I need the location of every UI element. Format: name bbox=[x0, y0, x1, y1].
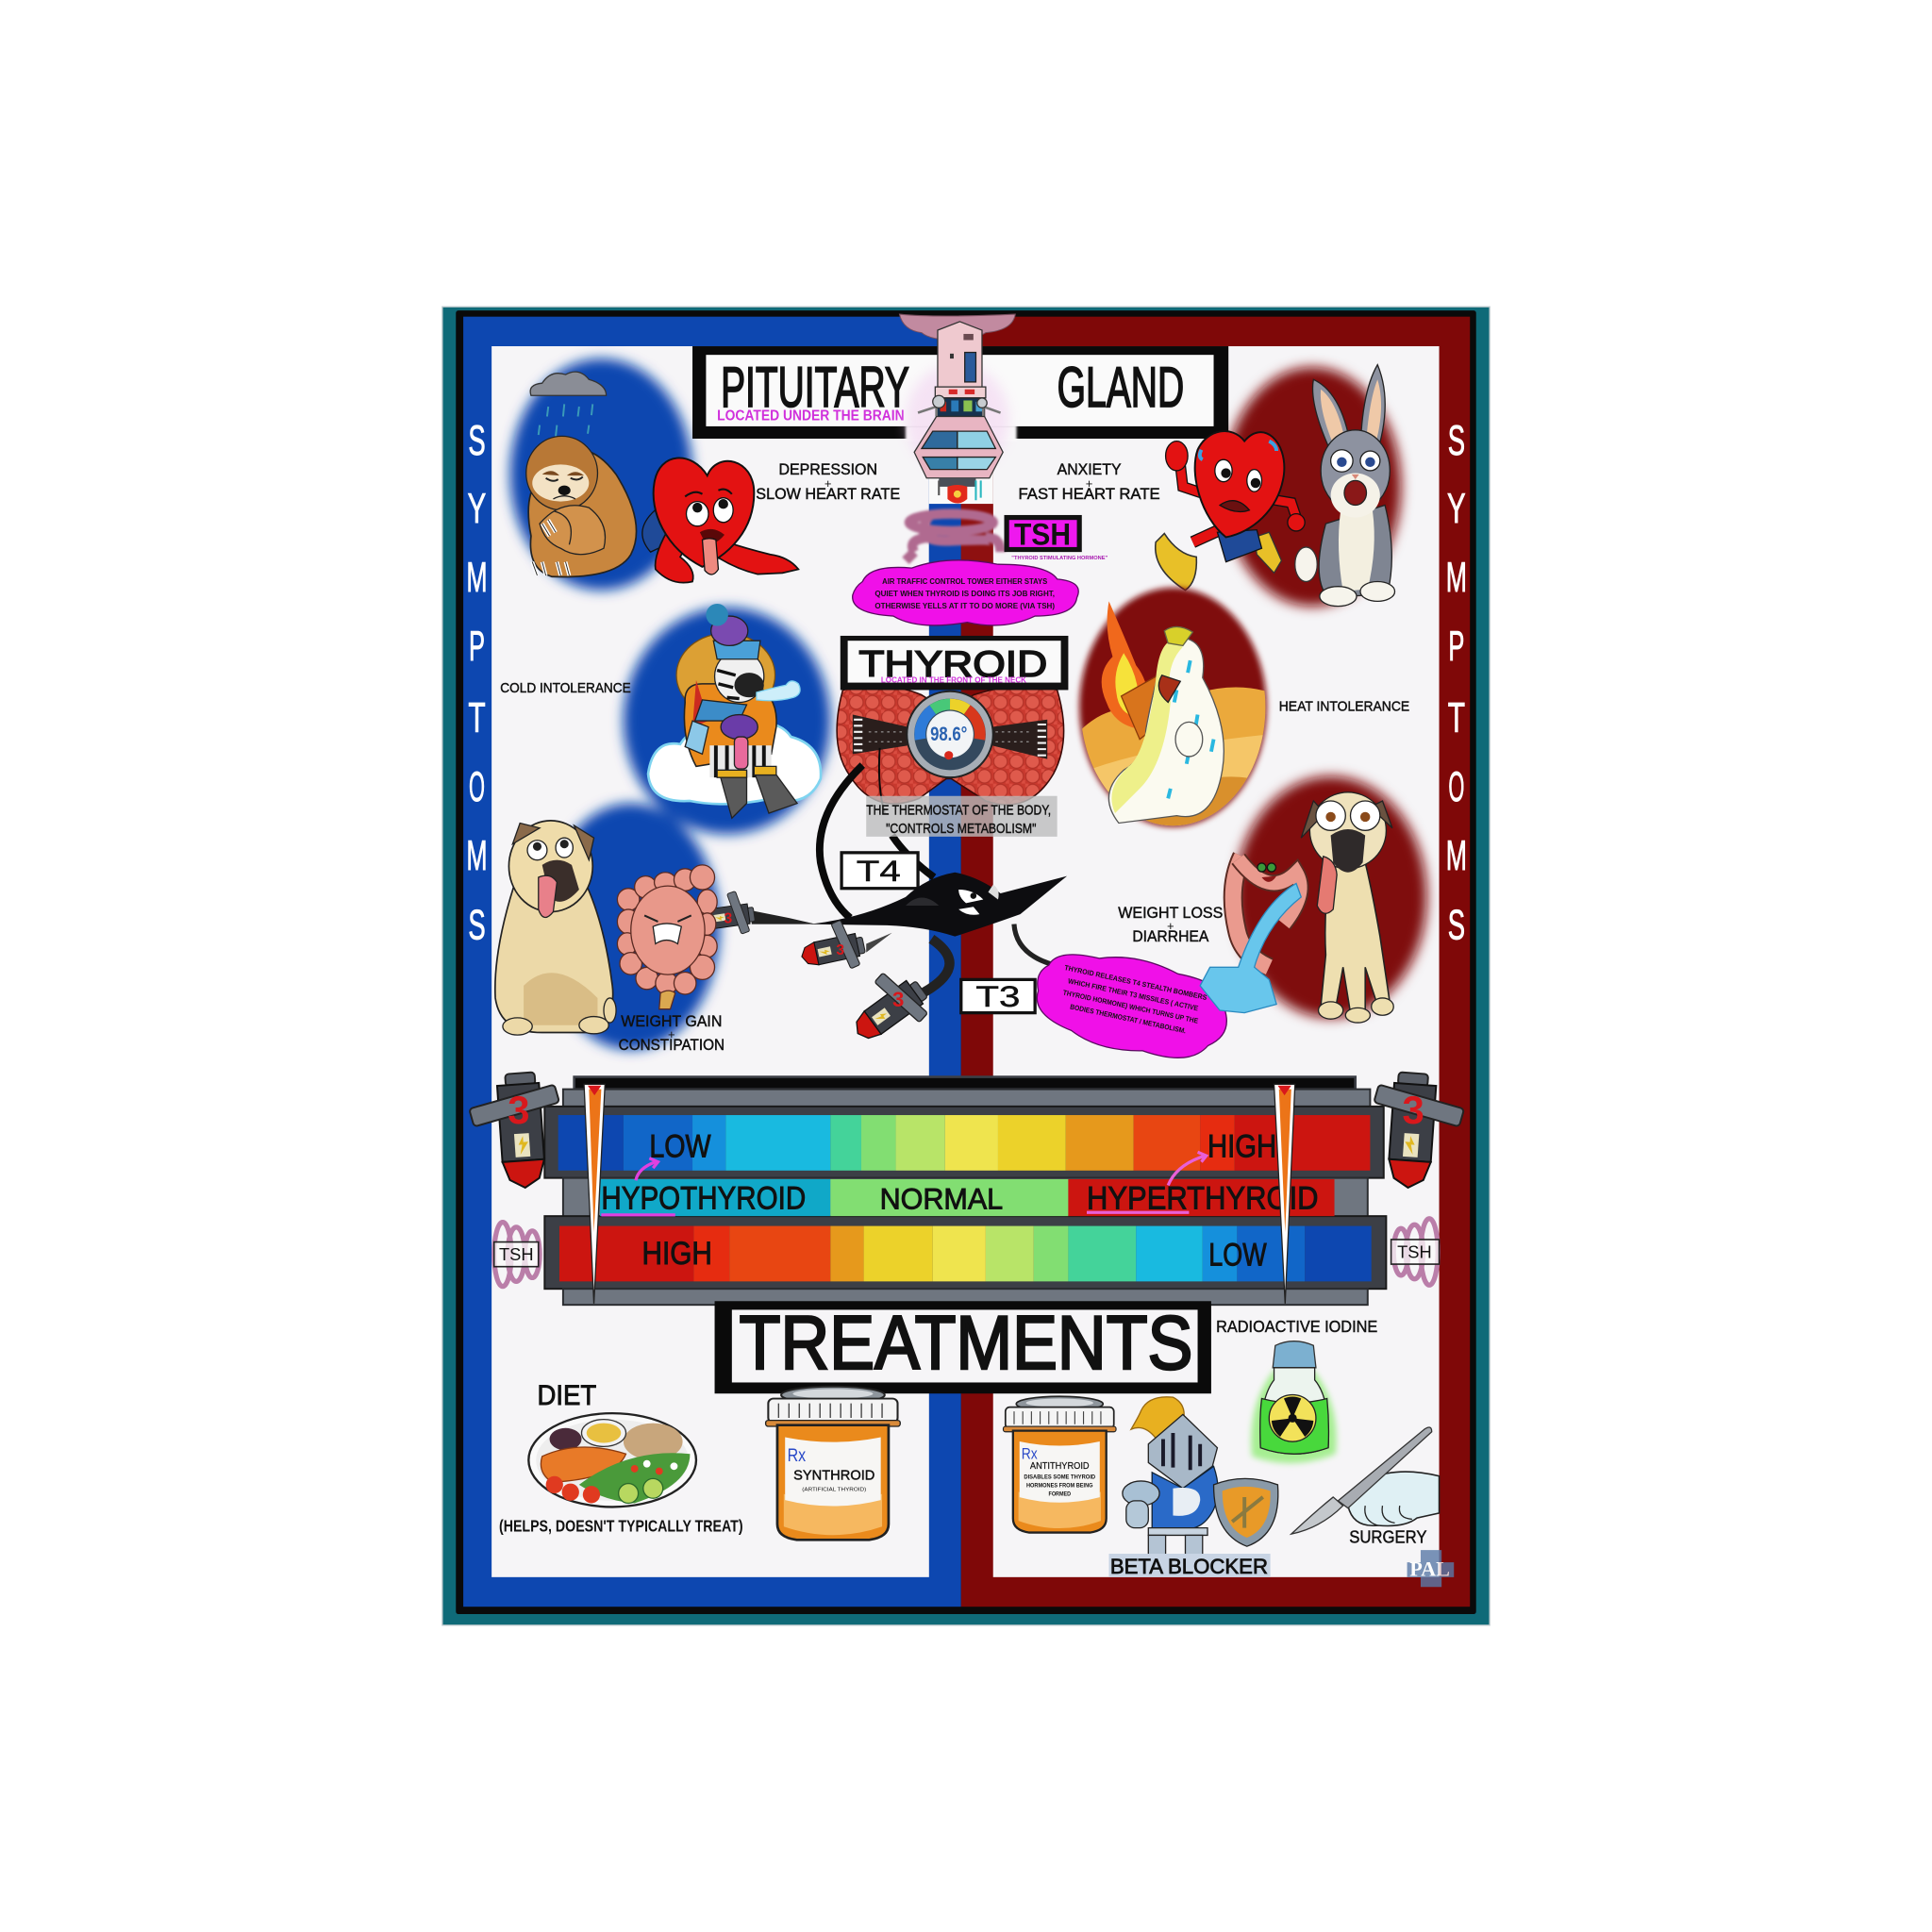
icon: beta blocker knight bbox=[1123, 1397, 1278, 1557]
icon: left TSH waves bbox=[494, 1223, 540, 1287]
right symptoms label: T bbox=[1448, 695, 1465, 741]
icon: overweight pug bbox=[495, 821, 616, 1035]
icon: scared rabbit bbox=[1295, 365, 1395, 607]
icon: T3 missile hitting intestine with trail: 3 bbox=[724, 910, 733, 926]
left symptoms label: O bbox=[469, 764, 485, 810]
icon: constipated intestine bbox=[617, 865, 717, 1009]
label: weight loss and diarrhea: DIARRHEA bbox=[1132, 928, 1208, 945]
icon: synthroid bottle: SYNTHROID bbox=[793, 1468, 874, 1484]
meter labels: HYPOTHYROID bbox=[601, 1180, 806, 1216]
icon: large T3 missile with trail: 3 bbox=[892, 988, 904, 1011]
icon: sad crawling heart bbox=[642, 458, 798, 583]
icon: plate of healthy food bbox=[528, 1413, 696, 1507]
icon: T3 missile hitting intestine with trail bbox=[696, 889, 816, 940]
callout: stealth bombers and T3 missiles: THYROID HORMONE) WHICH TURNS UP THE bbox=[1062, 989, 1199, 1025]
label: thermostat of the body: "CONTROLS METABOLISM" bbox=[886, 821, 1036, 837]
icon: left T3 missile: 3 bbox=[508, 1088, 530, 1132]
icon: hand holding scalpel bbox=[1291, 1427, 1440, 1534]
card background bbox=[442, 307, 1490, 1625]
icon: falling T3 missile bbox=[796, 916, 892, 978]
meter: T4/T3 level bar bbox=[558, 1115, 1370, 1171]
right symptoms label: S bbox=[1448, 418, 1465, 464]
icon: falling T3 missile: 3 bbox=[836, 942, 844, 958]
label: thermostat of the body bbox=[866, 796, 1058, 837]
TSH box bbox=[1004, 515, 1108, 561]
left symptoms label bbox=[466, 418, 488, 948]
icon: antithyroid bottle: HORMONES FROM BEING bbox=[1026, 1482, 1093, 1489]
icon: radioactive iodine bottle bbox=[1251, 1341, 1337, 1463]
right symptoms label: M bbox=[1446, 555, 1467, 601]
T3 label bbox=[961, 924, 1072, 1013]
icon: antithyroid bottle: ANTITHYROID bbox=[1030, 1461, 1090, 1472]
left symptoms label: M bbox=[466, 555, 488, 601]
title box: pituitary gland bbox=[692, 346, 1228, 441]
T3 label: T3 bbox=[975, 980, 1020, 1013]
icon: left T3 missile bbox=[467, 1071, 565, 1191]
TSH box: "THYROID STIMULATING HORMONE" bbox=[1011, 556, 1108, 561]
left symptoms label: Y bbox=[468, 486, 486, 532]
icon: synthroid bottle bbox=[766, 1387, 900, 1540]
left symptoms label: S bbox=[468, 902, 486, 948]
title box: pituitary gland: LOCATED UNDER THE BRAIN bbox=[717, 408, 905, 424]
label: cold intolerance: COLD INTOLERANCE bbox=[500, 680, 631, 696]
left symptoms label: P bbox=[469, 624, 485, 670]
radio waves from tower bbox=[906, 504, 1001, 566]
logo: PAL: PAL bbox=[1409, 1557, 1450, 1581]
callout: stealth bombers and T3 missiles: WHICH FIRE THEIR T3 MISSILES ( ACTIVE bbox=[1067, 976, 1199, 1012]
infographic canvas bbox=[441, 306, 1491, 1626]
meter needle: low end bbox=[584, 1084, 605, 1304]
callout: stealth bombers and T3 missiles: THYROID RELEASES T4 STEALTH BOMBERS bbox=[1064, 963, 1208, 1002]
right symptoms label: O bbox=[1448, 764, 1464, 810]
label: helps, doesn't treat: (HELPS, DOESN'T TYPICALLY TREAT) bbox=[499, 1517, 743, 1536]
callout: air traffic control tower bbox=[853, 560, 1078, 625]
label: anxiety and fast heart rate: FAST HEART RATE bbox=[1019, 486, 1160, 503]
callout: air traffic control tower: AIR TRAFFIC CONTROL TOWER EITHER STAYS bbox=[882, 576, 1048, 586]
label: depression and slow heart rate: DEPRESSION bbox=[778, 461, 877, 478]
meter: TSH level bar bbox=[559, 1226, 1372, 1281]
meter labels: LOW bbox=[649, 1128, 711, 1164]
meter labels: NORMAL bbox=[880, 1182, 1003, 1215]
icon: right T3 missile bbox=[1368, 1071, 1466, 1191]
title box: thyroid bbox=[841, 636, 1068, 690]
meter: thyroid state bar bbox=[600, 1179, 1335, 1216]
T4 release trails bbox=[820, 748, 934, 918]
left symptoms label: T bbox=[468, 695, 486, 741]
right symptoms label: Y bbox=[1447, 486, 1466, 532]
label: weight loss and diarrhea: WEIGHT LOSS bbox=[1118, 905, 1223, 922]
symptom background blobs bbox=[510, 358, 1426, 1050]
callout: stealth bombers and T3 missiles: BODIES THERMOSTAT / METABOLISM. bbox=[1069, 1002, 1187, 1035]
meter needle: high end bbox=[1274, 1084, 1295, 1304]
label: diet: DIET bbox=[537, 1380, 596, 1411]
icon: sloth with rain cloud bbox=[526, 372, 637, 577]
icon: synthroid bottle: (ARTIFICIAL THYROID) bbox=[802, 1487, 866, 1492]
title box: thyroid: LOCATED IN THE FRONT OF THE NECK bbox=[881, 676, 1026, 685]
icon: antithyroid bottle: Rx bbox=[1022, 1444, 1038, 1462]
meter labels: HYPERTHYROID bbox=[1087, 1180, 1319, 1216]
label: radioactive iodine: RADIOACTIVE IODINE bbox=[1216, 1317, 1377, 1336]
icon: running scared heart bbox=[1156, 431, 1305, 591]
right symptoms label bbox=[1446, 418, 1467, 948]
label: weight loss and diarrhea: + bbox=[1167, 919, 1174, 933]
icon: thyroid gland with thermostat bbox=[837, 685, 1064, 805]
label: depression and slow heart rate: + bbox=[824, 476, 832, 491]
T4 label bbox=[841, 853, 918, 889]
label: beta blocker: BETA BLOCKER bbox=[1110, 1555, 1268, 1578]
callout: stealth bombers and T3 missiles bbox=[1027, 940, 1236, 1071]
icon: right TSH waves bbox=[1391, 1219, 1440, 1285]
title box: pituitary gland: PITUITARY bbox=[721, 356, 909, 419]
title box: pituitary gland: GLAND bbox=[1058, 356, 1184, 419]
T4 label: T4 bbox=[857, 855, 901, 888]
label: depression and slow heart rate: SLOW HEART RATE bbox=[756, 486, 900, 503]
meter labels bbox=[601, 1128, 1319, 1273]
icon: right T3 missile: 3 bbox=[1402, 1088, 1424, 1132]
label: anxiety and fast heart rate bbox=[1019, 461, 1160, 503]
label: weight gain and constipation: WEIGHT GAIN bbox=[621, 1013, 722, 1030]
left symptoms label: M bbox=[466, 833, 488, 879]
label: anxiety and fast heart rate: ANXIETY bbox=[1058, 461, 1122, 478]
annotation: hypo prefix arrow bbox=[601, 1158, 675, 1215]
TSH box: TSH bbox=[1014, 516, 1071, 551]
icon: synthroid bottle: Rx bbox=[788, 1445, 806, 1466]
icon: diarrhea intestine with water bbox=[1200, 857, 1301, 1013]
meter labels: HIGH bbox=[641, 1236, 712, 1272]
label: weight gain and constipation: CONSTIPATION bbox=[619, 1037, 724, 1054]
label: surgery: SURGERY bbox=[1349, 1526, 1426, 1546]
icon: antithyroid bottle bbox=[1003, 1396, 1116, 1533]
icon: skinny pug bbox=[1301, 792, 1393, 1023]
logo: PAL bbox=[1407, 1550, 1454, 1587]
callout: air traffic control tower: QUIET WHEN THYROID IS DOING ITS JOB RIGHT, bbox=[874, 589, 1055, 598]
icon: right TSH waves: TSH bbox=[1397, 1242, 1432, 1262]
label: weight gain and constipation: + bbox=[668, 1027, 675, 1041]
icon: left TSH waves: TSH bbox=[499, 1244, 534, 1264]
icon: overheated polar bear in desert bbox=[1072, 588, 1281, 838]
annotation: hyper prefix arrow bbox=[1087, 1152, 1207, 1212]
icon: freezing zebra on snow cloud bbox=[648, 604, 821, 818]
meter: levels chart frame bbox=[544, 1077, 1386, 1305]
callout: air traffic control tower: OTHERWISE YELLS AT IT TO DO MORE (VIA TSH) bbox=[874, 601, 1055, 610]
icon: large T3 missile with trail bbox=[838, 939, 950, 1056]
label: weight loss and diarrhea bbox=[1118, 905, 1223, 945]
label: anxiety and fast heart rate: + bbox=[1086, 476, 1092, 491]
icon: stealth bomber bbox=[810, 873, 1067, 937]
title box: thyroid: THYROID bbox=[858, 644, 1047, 685]
icon: antithyroid bottle: DISABLES SOME THYROID bbox=[1024, 1474, 1095, 1480]
meter labels: HIGH bbox=[1208, 1128, 1276, 1164]
right symptoms label: M bbox=[1446, 833, 1467, 879]
icon: thyroid gland with thermostat: 98.6° bbox=[930, 724, 967, 745]
meter labels: LOW bbox=[1208, 1237, 1267, 1273]
right symptoms label: P bbox=[1448, 624, 1464, 670]
label: depression and slow heart rate bbox=[756, 461, 900, 503]
label: heat intolerance: HEAT INTOLERANCE bbox=[1279, 699, 1409, 715]
label: thermostat of the body: THE THERMOSTAT OF THE BODY, bbox=[866, 802, 1051, 818]
icon: air traffic control tower bbox=[899, 314, 1015, 504]
treatments heading: TREATMENTS bbox=[740, 1301, 1192, 1386]
left symptoms label: S bbox=[468, 418, 486, 464]
label: weight gain and constipation bbox=[619, 1013, 724, 1054]
right symptoms label: S bbox=[1448, 902, 1465, 948]
icon: antithyroid bottle: FORMED bbox=[1049, 1491, 1071, 1498]
